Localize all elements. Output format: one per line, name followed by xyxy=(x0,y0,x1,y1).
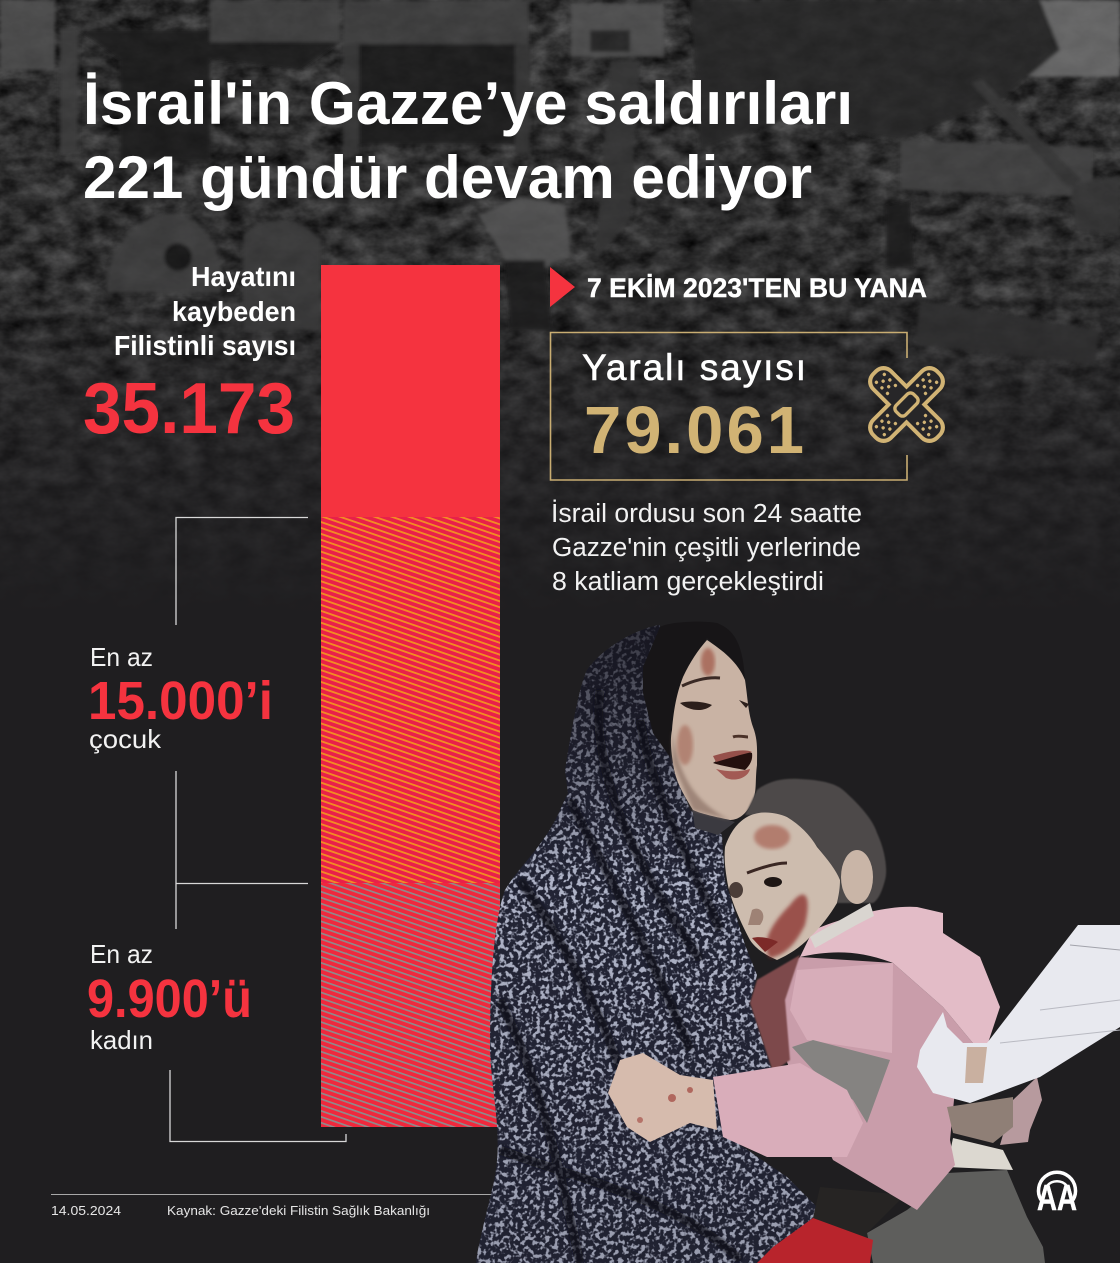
label: women: En az xyxy=(90,939,153,969)
child's hair xyxy=(745,779,886,903)
title: İsrail'in Gazze’ye saldırıları xyxy=(83,70,853,137)
date: 14.05.2024 xyxy=(51,1204,121,1218)
child's pink jacket body xyxy=(760,957,977,1210)
child's ear xyxy=(841,850,873,904)
subheading: since 7 October: 7 EKİM 2023'TEN BU YANA xyxy=(587,273,927,303)
child's hand on the woman's arm xyxy=(608,1053,717,1142)
child's upper sleeve xyxy=(790,963,893,1053)
sleeve cuff behind the hand xyxy=(1000,1077,1042,1145)
child's hood xyxy=(800,907,1000,1048)
bar segment: women xyxy=(321,883,500,1127)
text block: massacres in last 24 hours: İsrail ordusu son 24 saatte xyxy=(551,499,862,528)
woman's black under-scarf xyxy=(643,622,745,757)
background photo: destroyed buildings and rubble xyxy=(0,0,1120,640)
label: women xyxy=(87,939,252,1055)
panel: wounded count: Yaralı sayısı xyxy=(582,347,806,388)
child's face xyxy=(725,812,873,960)
connector lines xyxy=(170,518,346,1142)
label: total killed: Hayatını xyxy=(191,261,296,292)
woman's face xyxy=(671,640,757,820)
hand holding paper from below xyxy=(947,1097,1013,1143)
thumb over paper xyxy=(965,1047,987,1083)
bar chart: deaths, children, women xyxy=(321,265,500,1127)
child's trousers xyxy=(867,1170,1045,1263)
woman's patterned scarf and dress xyxy=(470,620,840,1263)
woman's neck cloth xyxy=(692,808,735,835)
label: women: kadın xyxy=(90,1025,153,1055)
label: children xyxy=(88,642,273,754)
label: children: En az xyxy=(90,642,153,672)
icon: crossed bandages xyxy=(840,338,973,471)
label: children: 15.000’i xyxy=(88,671,273,731)
label: children: çocuk xyxy=(89,724,162,754)
text block: massacres in last 24 hours: Gazze'nin çeşitli yerlerinde xyxy=(552,534,861,562)
icon: red arrow xyxy=(550,267,575,307)
panel: wounded count: 79.061 xyxy=(584,393,804,468)
title: 221 gündür devam ediyor xyxy=(83,144,812,211)
panel: wounded count xyxy=(550,332,907,480)
photo: mother holding wounded child xyxy=(470,620,1120,1263)
label: total killed: Filistinli sayısı xyxy=(114,330,296,361)
title xyxy=(83,70,853,211)
child's lower sleeve xyxy=(713,1063,863,1157)
label: women: 9.900’ü xyxy=(87,969,252,1029)
child's grey sleeve band xyxy=(792,1040,890,1123)
label: total killed: 35.173 xyxy=(83,369,295,449)
red cloth at bottom xyxy=(757,1218,873,1263)
text block: massacres in last 24 hours: 8 katliam gerçekleştirdi xyxy=(552,568,824,596)
text block: massacres in last 24 hours xyxy=(551,499,862,596)
dark shadow under jacket xyxy=(813,1187,905,1263)
bloodstain on jacket xyxy=(750,955,800,1072)
label: total killed: kaybeden xyxy=(172,296,296,327)
white shirt xyxy=(947,1138,1013,1170)
bar segment: total killed xyxy=(321,265,500,517)
label: total killed xyxy=(83,261,296,449)
logo: Anadolu Agency: AA xyxy=(1037,1177,1077,1218)
paper sheet xyxy=(917,925,1120,1103)
child's white collar xyxy=(810,903,874,948)
footer divider xyxy=(51,1194,491,1195)
source: Kaynak: Gazze'deki Filistin Sağlık Bakanlığı xyxy=(167,1204,430,1218)
bar segment: children xyxy=(321,517,500,883)
